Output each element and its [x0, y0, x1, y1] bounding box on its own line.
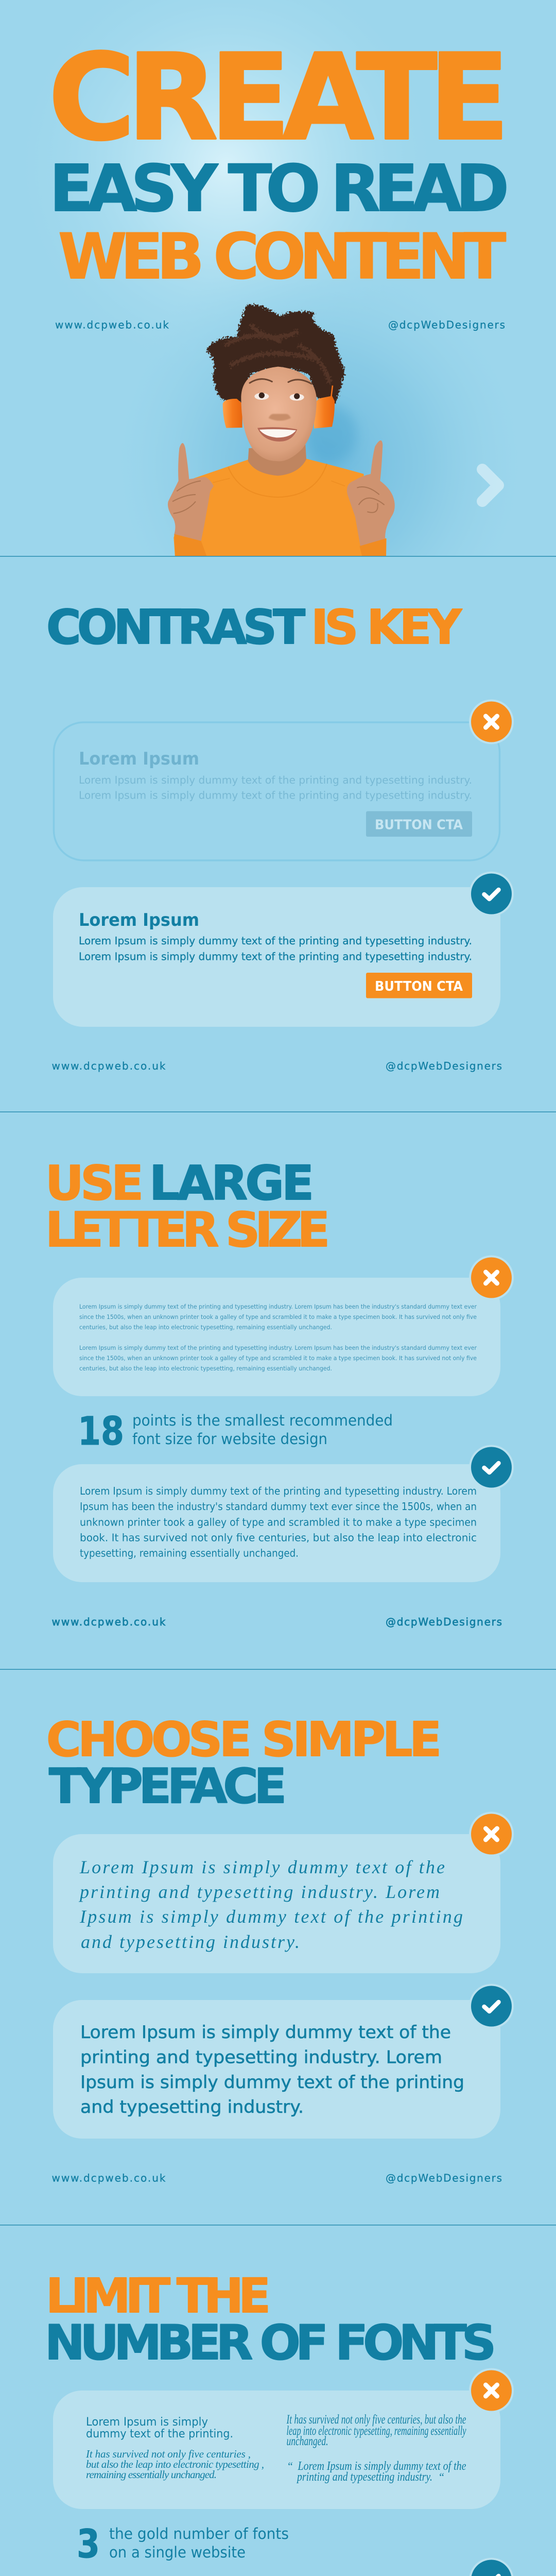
icon: cross badge: [469, 1811, 514, 1857]
footer link: handle: @dcpWebDesigners: [388, 318, 505, 331]
script paragraph: remaining essentially unchanged.: [86, 2468, 217, 2481]
illustration: woman pointing up with headphones: [168, 304, 395, 556]
card: small text: [53, 1278, 500, 1396]
heading: number of fonts: NUMBER OF FONTS: [45, 2315, 496, 2370]
footer link: website: www.dcpweb.co.uk: [51, 1060, 166, 1072]
small paragraph one: [79, 1303, 477, 1331]
paragraph large: typesetting, remaining essentially unchanged.: [80, 1547, 299, 1559]
footer link: website: www.dcpweb.co.uk: [51, 2172, 166, 2184]
sans heading: [86, 2416, 233, 2441]
heading: use: USE: [45, 1156, 144, 1211]
serif quote: Lorem Ipsum is simply dummy text of the: [298, 2460, 466, 2473]
button: cta: BUTTON CTA: [375, 979, 463, 994]
small paragraph two: centuries, but also the leap into electronic typesetting, remaining essentially unchanged.: [79, 1365, 332, 1372]
script paragraph: It has survived not only five centuries ,: [85, 2448, 251, 2460]
script paragraph: and typesetting industry.: [81, 1931, 300, 1952]
sans heading: Lorem Ipsum is simply: [86, 2416, 208, 2429]
paragraph large: book. It has survived not only five centuries, but also the leap into electronic: [80, 1531, 477, 1544]
card: large text: [53, 1464, 500, 1582]
simple paragraph: Ipsum is simply dummy text of the printing: [80, 2072, 464, 2093]
script paragraph: but also the leap into electronic typesetting ,: [86, 2458, 264, 2470]
icon: check badge: [469, 872, 514, 916]
stat caption: points is the smallest recommended: [132, 1412, 393, 1429]
footer link: handle: @dcpWebDesigners: [386, 1616, 502, 1628]
heading: large: LARGE: [149, 1156, 314, 1211]
card: simple typeface: [53, 2000, 500, 2139]
icon: cross badge: [469, 2368, 514, 2413]
panel: choose simple typeface: [46, 1712, 514, 2184]
heading: typeface: TYPEFACE: [49, 1758, 287, 1814]
simple paragraph: printing and typesetting industry. Lorem: [80, 2047, 442, 2068]
script paragraph: printing and typesetting industry. Lorem: [78, 1882, 440, 1902]
card heading: Lorem Ipsum: [79, 910, 199, 930]
icon: check badge: [469, 2557, 514, 2576]
icon: cross badge: [469, 700, 514, 744]
divider line 3: [0, 1669, 556, 1670]
stat caption: the gold number of fonts: [109, 2525, 289, 2543]
paragraph large: unknown printer took a galley of type and scrambled it to make a type specimen: [80, 1516, 477, 1528]
card: low contrast: [54, 722, 499, 860]
card body text: Lorem Ipsum is simply dummy text of the printing and typesetting industry.: [79, 789, 472, 802]
simple paragraph: and typesetting industry.: [80, 2097, 304, 2117]
stat caption: on a single website: [109, 2544, 246, 2561]
heading: limit the: LIMIT THE: [46, 2268, 271, 2324]
script paragraph: Lorem Ipsum is simply dummy text of the: [79, 1857, 445, 1877]
simple paragraph: Lorem Ipsum is simply dummy text of the: [80, 2022, 451, 2043]
serif quote: “: [438, 2470, 444, 2483]
title: easy to read: EASY TO READ: [49, 151, 509, 226]
small paragraph one: Lorem Ipsum is simply dummy text of the printing and typesetting industry. Lorem Ipsum has been the industry's standard dummy text ever: [79, 1303, 477, 1310]
serif quote: [287, 2460, 466, 2484]
card: too many fonts: [53, 2391, 500, 2509]
button: faded cta: BUTTON CTA: [375, 817, 463, 833]
icon: check badge: [469, 1984, 514, 2029]
small paragraph two: since the 1500s, when an unknown printer took a galley of type and scrambled it to make a type specimen book. It has survived not only five: [79, 1354, 477, 1362]
simple paragraph: [80, 2022, 464, 2117]
stat caption: font size for website design: [132, 1430, 327, 1448]
footer link: handle: @dcpWebDesigners: [386, 1060, 502, 1072]
sans heading: dummy text of the printing.: [86, 2428, 233, 2441]
button: cta: [366, 973, 472, 998]
card: high contrast: [53, 887, 500, 1027]
footer link: handle: @dcpWebDesigners: [386, 2172, 502, 2184]
heading: letter size: LETTER SIZE: [45, 1202, 330, 1258]
footer link: website: www.dcpweb.co.uk: [55, 318, 169, 331]
card body text: Lorem Ipsum is simply dummy text of the printing and typesetting industry.: [79, 950, 472, 962]
icon: cross badge: [469, 1255, 514, 1300]
panel: use large letter size: [45, 1156, 514, 1628]
panel: contrast is key: [46, 600, 514, 1072]
paragraph large: [80, 1485, 477, 1559]
stat: 3: 3: [77, 2521, 100, 2567]
condensed script paragraph: It has survived not only five centuries, but also the: [286, 2413, 466, 2427]
card: script typeface: [53, 1834, 500, 1973]
title: create: CREATE: [48, 29, 510, 167]
small paragraph one: since the 1500s, when an unknown printer took a galley of type and scrambled it to make a type specimen book. It has survived not only five: [79, 1313, 477, 1320]
condensed script paragraph: [286, 2413, 466, 2448]
stat caption: [132, 1412, 393, 1448]
heading: choose simple: CHOOSE SIMPLE: [46, 1712, 442, 1767]
stat caption: [109, 2525, 289, 2561]
condensed script paragraph: leap into electronic typesetting, remaining essentially: [286, 2424, 466, 2438]
paragraph large: Ipsum has been the industry's standard dummy text ever since the 1500s, when an: [80, 1500, 477, 1513]
footer link: website: www.dcpweb.co.uk: [51, 1616, 166, 1628]
script paragraph: [85, 2448, 264, 2481]
serif quote: “: [287, 2460, 293, 2472]
condensed script paragraph: unchanged.: [286, 2434, 328, 2448]
small paragraph two: Lorem Ipsum is simply dummy text of the printing and typesetting industry. Lorem Ipsum has been the industry's standard dummy text ever: [79, 1344, 477, 1351]
small paragraph two: [79, 1344, 477, 1372]
card body text: [79, 774, 472, 802]
icon: next chevron: [482, 469, 498, 501]
card body text: Lorem Ipsum is simply dummy text of the printing and typesetting industry.: [79, 935, 472, 947]
script paragraph: Ipsum is simply dummy text of the printing: [79, 1906, 463, 1927]
card heading: Lorem Ipsum: [79, 749, 199, 769]
stat: 18: 18: [78, 1408, 124, 1454]
heading: is key: IS KEY: [311, 600, 462, 655]
icon: check badge: [469, 1445, 514, 1490]
small paragraph one: centuries, but also the leap into electronic typesetting, remaining essentially unchanged.: [79, 1324, 332, 1331]
script paragraph: [78, 1857, 463, 1952]
card body text: Lorem Ipsum is simply dummy text of the printing and typesetting industry.: [79, 774, 472, 786]
panel: hero: [0, 0, 556, 556]
heading: contrast: CONTRAST: [46, 600, 305, 655]
divider line 4: [0, 2225, 556, 2226]
serif quote: printing and typesetting industry.: [296, 2470, 432, 2484]
paragraph large: Lorem Ipsum is simply dummy text of the printing and typesetting industry. Lorem: [80, 1485, 477, 1497]
card body text: [79, 935, 472, 962]
panel: limit the number of fonts: [45, 2268, 514, 2576]
button: faded cta: [366, 811, 472, 837]
title: web content: WEB CONTENT: [58, 221, 506, 293]
